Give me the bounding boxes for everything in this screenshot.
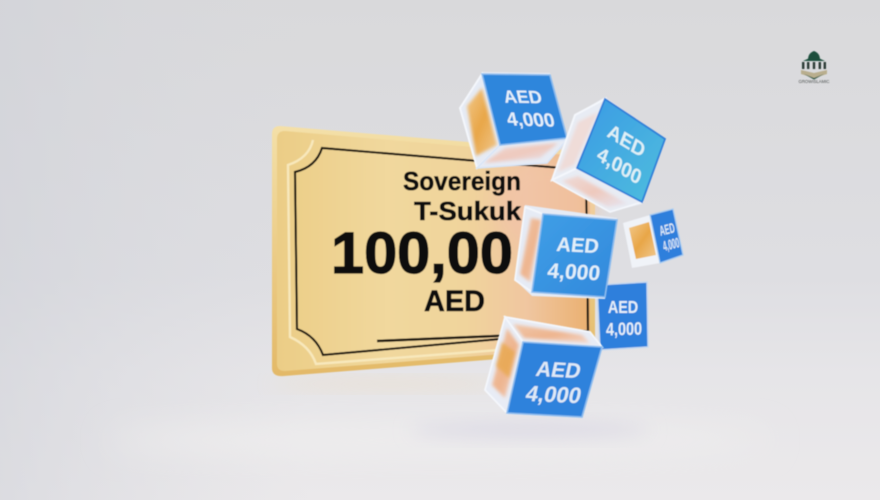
cube: top left — [460, 72, 567, 168]
logo: GrowIslamic — [798, 51, 830, 84]
cube label: AED — [555, 234, 600, 258]
cube: top right — [552, 97, 666, 212]
engraved frame line — [295, 148, 588, 355]
cube: flat back note — [597, 282, 648, 350]
embossed frame — [288, 140, 590, 364]
gold plaque — [272, 126, 595, 376]
cube label: AED — [608, 298, 638, 317]
cube: bottom — [485, 316, 603, 418]
cube label — [523, 357, 584, 408]
cube label: 4,000 — [594, 143, 644, 190]
cube label: 4,000 — [546, 260, 601, 285]
signature line — [377, 335, 520, 341]
icon: dome — [808, 51, 820, 60]
cube label: AED — [658, 221, 676, 240]
cube label: 4,000 — [606, 319, 642, 340]
icon: columns — [802, 62, 826, 69]
plaque currency: AED — [424, 285, 485, 318]
plaque subheading: T-Sukuk — [414, 196, 522, 226]
cube label: AED — [604, 120, 648, 163]
icon: book — [801, 70, 827, 78]
cube label — [606, 298, 642, 340]
plaque body — [272, 126, 595, 376]
floor shadow — [270, 379, 650, 438]
plaque amount: 100,00 — [331, 221, 513, 286]
cube label — [502, 87, 557, 132]
cube label — [658, 221, 681, 255]
cube label: 4,000 — [523, 381, 584, 408]
logo wordmark: GROWISLAMIC — [798, 79, 830, 84]
cube label: 4,000 — [662, 236, 681, 255]
cube label: AED — [534, 357, 583, 383]
cube label — [546, 234, 601, 285]
plaque heading: Sovereign — [403, 166, 521, 196]
cube label: AED — [502, 87, 544, 107]
cube label: 4,000 — [505, 109, 557, 132]
cube: small right — [623, 209, 683, 268]
cube label — [594, 120, 648, 190]
peach reflection — [495, 157, 595, 253]
cube: centre — [515, 205, 617, 299]
